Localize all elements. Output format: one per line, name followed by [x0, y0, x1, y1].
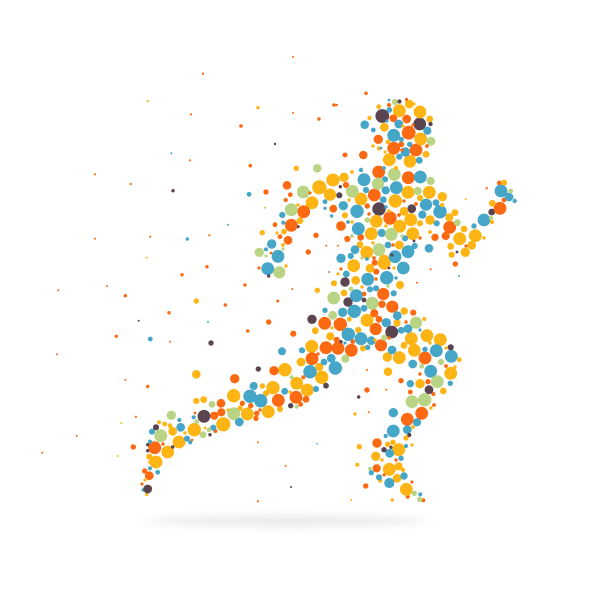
runner: rear leg and foot: [141, 308, 357, 496]
runner: front arm and fist: [432, 180, 516, 257]
runner: torso: [323, 166, 447, 309]
ground shadow: [149, 515, 425, 527]
scattered particles: [41, 56, 488, 502]
runner: head: [368, 98, 435, 167]
runner: front leg and foot: [347, 301, 461, 502]
runner: back arm: [255, 174, 339, 278]
